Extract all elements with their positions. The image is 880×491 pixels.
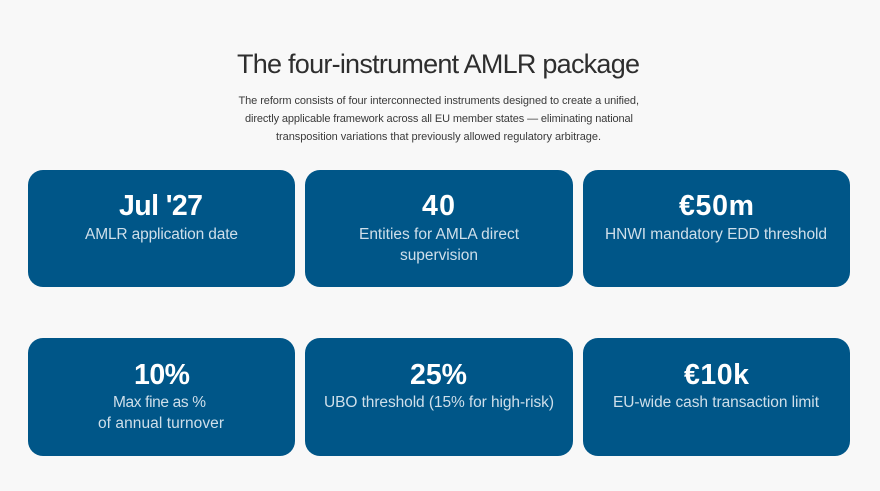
value: Jul '27 bbox=[119, 190, 203, 222]
label: EU-wide cash transaction limit bbox=[613, 394, 820, 411]
title: The four-instrument AMLR package bbox=[237, 49, 640, 79]
label: Entities for AMLA direct bbox=[359, 226, 520, 243]
card: max fine bbox=[28, 338, 295, 456]
card: application date bbox=[28, 170, 295, 287]
label: HNWI mandatory EDD threshold bbox=[605, 226, 827, 243]
intro text: directly applicable framework across all EU member states — eliminating national bbox=[245, 113, 633, 125]
value: 40 bbox=[422, 190, 455, 222]
label bbox=[98, 394, 224, 432]
intro text: transposition variations that previously allowed regulatory arbitrage. bbox=[276, 131, 601, 143]
label bbox=[359, 226, 520, 264]
label: UBO threshold (15% for high-risk) bbox=[324, 394, 554, 411]
label: Max fine as % bbox=[113, 394, 206, 411]
value: 25% bbox=[410, 359, 467, 391]
card: cash limit bbox=[583, 338, 850, 456]
card: AMLA entities bbox=[305, 170, 573, 287]
label: supervision bbox=[400, 247, 478, 264]
card: UBO threshold bbox=[305, 338, 573, 456]
value: 10% bbox=[134, 359, 190, 391]
intro text bbox=[238, 95, 639, 143]
value: €10k bbox=[684, 359, 749, 391]
card: HNWI threshold bbox=[583, 170, 850, 287]
label: AMLR application date bbox=[85, 226, 238, 243]
label: of annual turnover bbox=[98, 415, 224, 432]
value: €50m bbox=[679, 190, 754, 222]
intro text: The reform consists of four interconnected instruments designed to create a unified, bbox=[238, 95, 639, 107]
